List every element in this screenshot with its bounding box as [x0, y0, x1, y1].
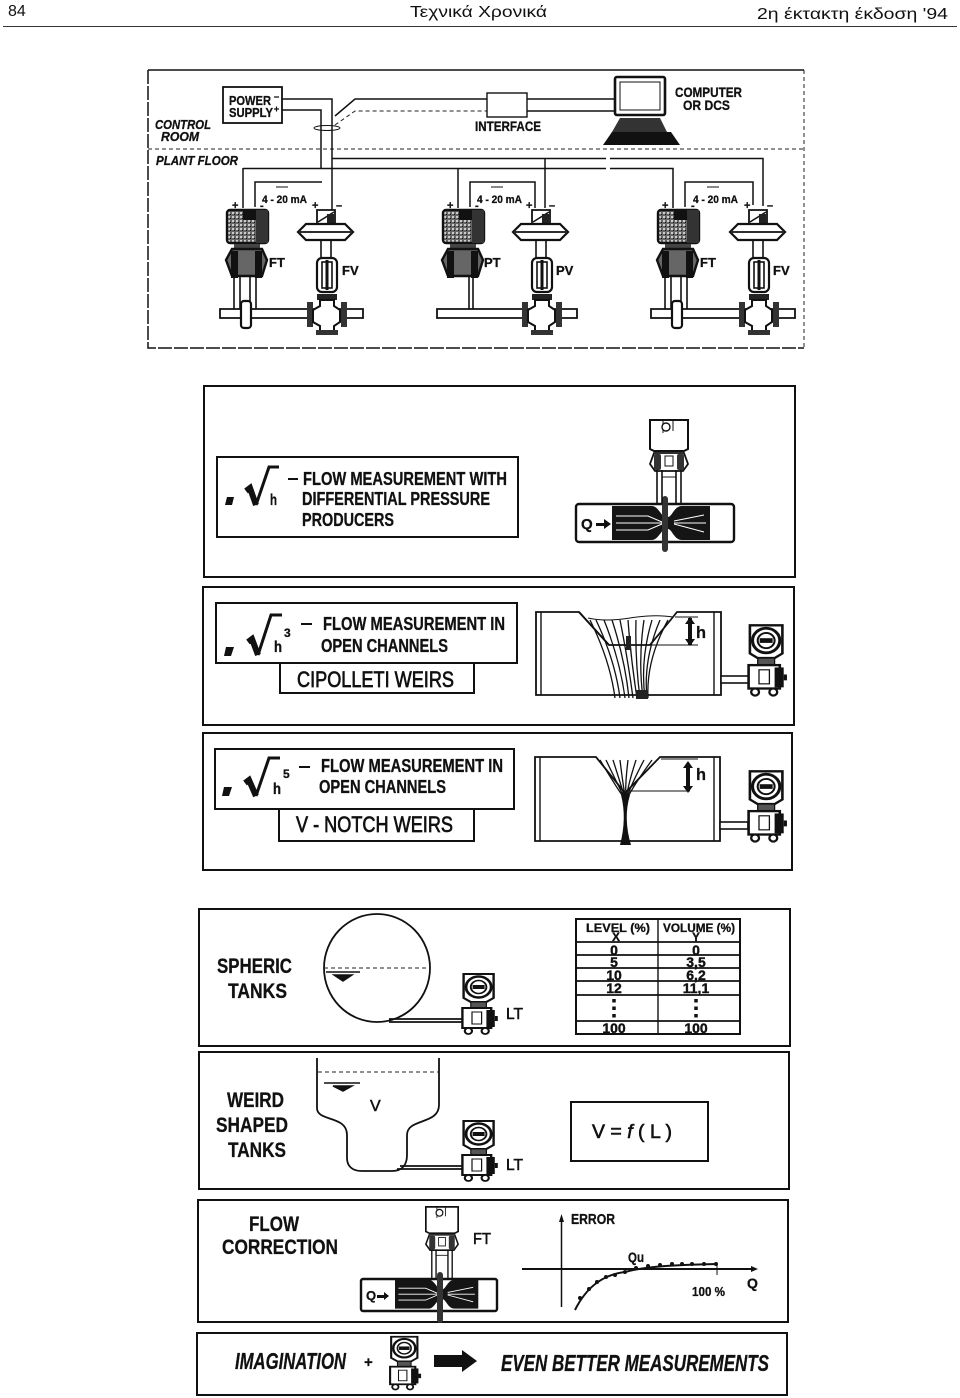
level to volume table: 100 — [684, 1020, 708, 1036]
loop 3: transmitter and valve: - — [691, 200, 695, 212]
loop 3: transmitter and valve — [651, 187, 795, 335]
heading: weird shaped tanks: TANKS — [228, 1139, 286, 1162]
panel: cipolletti weirs — [203, 587, 794, 725]
loop 3: transmitter and valve: FV — [773, 263, 790, 278]
text box: cube root formula: h — [274, 639, 282, 656]
loop 3: transmitter and valve: – — [767, 200, 773, 212]
error chart: Qu — [628, 1249, 644, 1265]
loop 1: transmitter and valve: + — [312, 200, 318, 212]
label: computer or DCS — [675, 84, 742, 113]
level to volume table: X — [612, 930, 620, 944]
heading: flow correction — [222, 1213, 338, 1259]
power supply box: SUPPLY — [229, 105, 273, 120]
text box: cube root formula — [216, 603, 517, 663]
error chart: Q — [747, 1275, 758, 1291]
error chart: ERROR — [571, 1211, 615, 1228]
heading: spheric tanks: SPHERIC — [217, 955, 292, 978]
panel: spheric tanks — [199, 909, 790, 1046]
loop 2: transmitter and valve: - — [475, 200, 479, 212]
heading: weird shaped tanks — [216, 1089, 288, 1162]
spherical tank: LT — [506, 1006, 523, 1023]
spherical tank — [324, 914, 523, 1034]
page header: 2η έκτακτη έκδοση '94 — [757, 6, 948, 23]
level to volume table: LEVEL (%) — [586, 921, 650, 935]
text box: cube root formula: 3 — [284, 626, 291, 640]
irregular tank: V — [370, 1098, 381, 1115]
loop 2: transmitter and valve: + — [526, 200, 532, 212]
loop 2: transmitter and valve: PT — [484, 255, 501, 270]
plus sign: + — [364, 1354, 373, 1371]
label: control room: ROOM — [161, 129, 200, 144]
slogan: even better measurements: EVEN BETTER MEASUREMENTS — [501, 1350, 769, 1376]
loop 2: transmitter and valve: + — [447, 200, 453, 212]
text box: fifth power formula: h — [273, 781, 281, 798]
loop 3: transmitter and valve: 4 - 20 mA — [693, 194, 738, 206]
signal wiring — [243, 99, 763, 210]
text box: square root of h: PRODUCERS — [302, 510, 394, 530]
interface box — [475, 93, 541, 134]
icon: orifice flow transmitter: Q — [581, 516, 593, 533]
level to volume table: 11,1 — [683, 980, 709, 996]
loop 1: transmitter and valve: + — [232, 200, 238, 212]
text box: cube root formula: OPEN CHANNELS — [321, 636, 448, 656]
loop 1: transmitter and valve: – — [336, 200, 342, 212]
loop 2: transmitter and valve: 4 - 20 mA — [477, 194, 522, 206]
icon: orifice flow transmitter: Q — [366, 1288, 376, 1303]
text box: square root of h: h — [270, 492, 277, 509]
formula box — [571, 1102, 708, 1161]
level to volume table: Y — [692, 930, 700, 944]
page header: 84 — [8, 3, 26, 20]
icon: transmitter — [390, 1337, 421, 1390]
label: control room — [155, 117, 211, 144]
heading: flow correction: CORRECTION — [222, 1236, 338, 1259]
panel: v-notch weirs — [203, 733, 792, 870]
panel: flow correction — [198, 1200, 788, 1323]
text box: square root of h: DIFFERENTIAL PRESSURE — [302, 489, 490, 509]
loop 1: transmitter and valve: - — [260, 200, 264, 212]
heading: spheric tanks: TANKS — [228, 980, 287, 1003]
heading: weird shaped tanks: SHAPED — [216, 1114, 288, 1137]
loop 1: transmitter and valve: 4 - 20 mA — [262, 194, 307, 206]
panel: imagination slogan — [197, 1333, 787, 1395]
loop 2: transmitter and valve: PV — [556, 263, 574, 278]
text box: square root of h: FLOW MEASUREMENT WITH — [303, 469, 507, 489]
label: computer or DCS: OR DCS — [683, 97, 730, 113]
level to volume table: VOLUME (%) — [663, 921, 735, 935]
icon: orifice flow transmitter — [576, 420, 734, 552]
label: v-notch weirs: V - NOTCH WEIRS — [296, 812, 453, 837]
slogan: imagination: IMAGINATION — [235, 1348, 346, 1374]
text box: fifth power formula — [215, 749, 514, 809]
error chart — [522, 1211, 758, 1310]
level to volume table: 10 — [606, 967, 622, 983]
icon: computer — [603, 77, 680, 145]
level to volume table: 0 — [692, 942, 700, 958]
weir diagram — [535, 757, 787, 845]
level to volume table: 3,5 — [686, 954, 706, 970]
label: cipolleti weirs: CIPOLLETI WEIRS — [297, 667, 454, 692]
level to volume table: 12 — [606, 980, 622, 996]
loop 3: transmitter and valve: FT — [700, 255, 716, 270]
text box: cube root formula: FLOW MEASUREMENT IN — [323, 614, 505, 634]
loop 2: transmitter and valve — [437, 187, 577, 335]
loop 1: transmitter and valve: FV — [342, 263, 359, 278]
loop 3: transmitter and valve: + — [662, 200, 668, 212]
irregular tank: LT — [506, 1157, 523, 1174]
label: computer or DCS: COMPUTER — [675, 84, 742, 100]
label: plant floor: PLANT FLOOR — [156, 153, 239, 168]
weir diagram: h — [696, 765, 706, 784]
panel: control loop system diagram — [148, 70, 804, 348]
arrow — [434, 1350, 477, 1372]
loop 2: transmitter and valve: – — [549, 200, 555, 212]
icon: orifice flow transmitter: FT — [473, 1231, 491, 1248]
page header — [3, 3, 957, 26]
text box: fifth power formula: FLOW MEASUREMENT IN — [321, 756, 503, 776]
label: v-notch weirs — [279, 809, 474, 841]
heading: weird shaped tanks: WEIRD — [227, 1089, 284, 1112]
label: control room: CONTROL — [155, 117, 211, 132]
panel: differential pressure flow — [204, 386, 795, 577]
interface box: INTERFACE — [475, 118, 541, 134]
weir diagram — [536, 612, 787, 699]
error chart: 100 % — [692, 1284, 725, 1299]
loop 1: transmitter and valve: FT — [269, 255, 285, 270]
level to volume table: 100 — [602, 1020, 626, 1036]
page header: Τεχνικά Χρονικά — [410, 4, 547, 21]
power supply box — [223, 87, 282, 123]
text box: fifth power formula: OPEN CHANNELS — [319, 777, 446, 797]
loop 3: transmitter and valve: + — [744, 200, 750, 212]
loop 1: transmitter and valve — [220, 187, 363, 335]
level to volume table: 0 — [610, 942, 618, 958]
formula box: V = f ( L ) — [592, 1122, 672, 1143]
icon: orifice flow transmitter — [361, 1207, 497, 1323]
heading: spheric tanks — [217, 955, 292, 1003]
power supply box: POWER — [229, 93, 272, 108]
level to volume table: 6,2 — [686, 967, 706, 983]
heading: flow correction: FLOW — [249, 1213, 299, 1236]
text box: fifth power formula: 5 — [283, 767, 290, 781]
irregular tank — [317, 1058, 523, 1181]
level to volume table: 5 — [610, 954, 618, 970]
panel: weird shaped tanks — [199, 1052, 789, 1189]
level to volume table — [576, 919, 740, 1036]
text box: square root of h — [217, 457, 518, 537]
weir diagram: h — [696, 623, 706, 642]
